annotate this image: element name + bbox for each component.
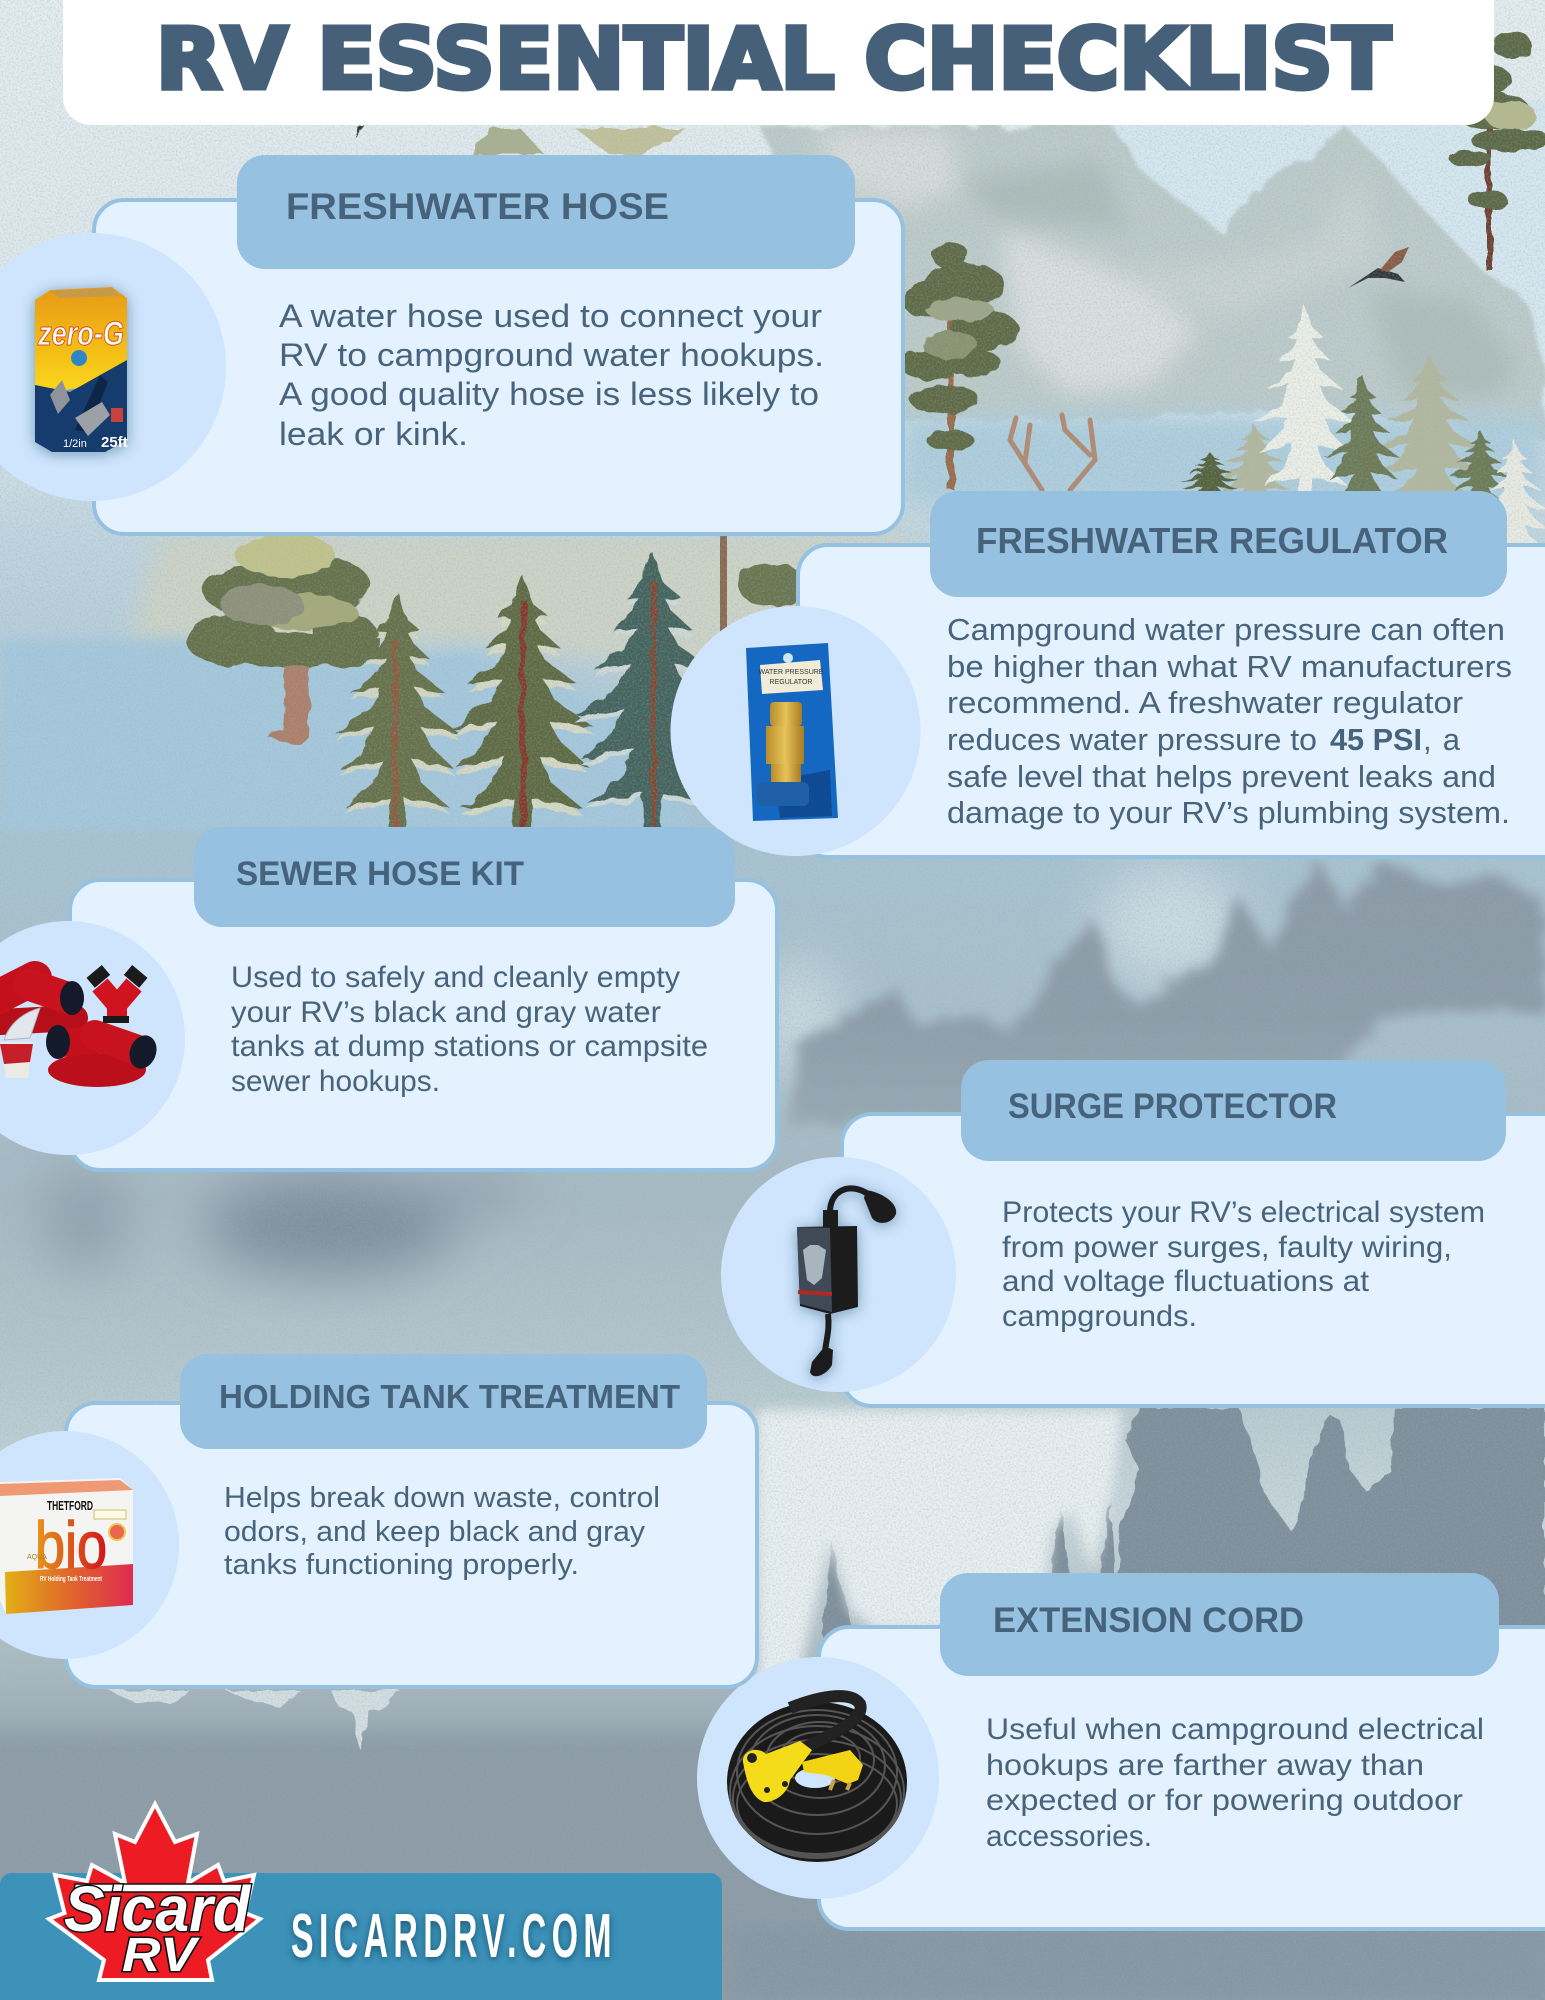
body text: Useful when campground electrical xyxy=(986,1713,1484,1746)
footer band xyxy=(0,1804,722,2000)
website: SICARDRV.COM xyxy=(291,1902,617,1971)
icon: surge protector xyxy=(797,1188,896,1376)
mid mist patch xyxy=(45,1165,530,1275)
icon: pressure regulator in package: WATER PRESSURE xyxy=(759,669,824,676)
lower snow streaks xyxy=(105,1690,400,1750)
heading: FRESHWATER REGULATOR xyxy=(976,520,1448,561)
icon: Thetford aqua-bio box: AQUA xyxy=(27,1554,47,1561)
logo: Sicard RV maple leaf xyxy=(49,1804,260,1982)
icon: Thetford aqua-bio box: RV Holding Tank Treatment xyxy=(40,1574,102,1583)
body text: A good quality hose is less likely to xyxy=(279,376,819,412)
body text: 45 PSI xyxy=(1330,722,1422,757)
body text: expected or for powering outdoor xyxy=(986,1784,1463,1817)
heading plate xyxy=(237,155,855,269)
image circle xyxy=(0,233,226,501)
body text: hookups are farther away than xyxy=(986,1749,1424,1782)
body text: tanks at dump stations or campsite xyxy=(231,1030,708,1063)
heading: SURGE PROTECTOR xyxy=(1008,1087,1337,1126)
icon: pressure regulator in package: REGULATOR xyxy=(770,679,812,686)
image circle xyxy=(721,1157,956,1392)
logo: Sicard RV maple leaf: Sicard xyxy=(64,1873,252,1945)
blue snowfield left xyxy=(0,640,700,830)
icon: Thetford aqua-bio box: THETFORD xyxy=(47,1498,93,1513)
icon: Zero-G hose box: zero-G xyxy=(37,315,124,353)
spruce: olive left xyxy=(335,592,460,838)
trunk: pale distant trunk xyxy=(720,534,727,634)
heading plate xyxy=(940,1573,1499,1676)
body text xyxy=(947,612,1512,830)
title band xyxy=(63,0,1494,125)
body text: damage to your RV’s plumbing system. xyxy=(947,795,1510,830)
small forest right xyxy=(1180,305,1545,560)
far mist forest xyxy=(790,860,1545,1125)
small top trees xyxy=(355,126,685,155)
body text: recommend. A freshwater regulator xyxy=(947,685,1463,720)
antlers xyxy=(1010,415,1095,490)
body text xyxy=(231,961,708,1098)
panel: freshwater hose xyxy=(0,155,903,534)
icon: extension cord coil xyxy=(727,1696,907,1862)
icon: red sewer hose kit xyxy=(0,965,161,1087)
body text: safe level that helps prevent leaks and xyxy=(947,759,1496,794)
heading: SEWER HOSE KIT xyxy=(236,855,524,893)
far mist gap xyxy=(760,865,1245,1080)
lower dark forest xyxy=(815,1408,1545,1740)
pine: right of first card xyxy=(900,241,1019,490)
body text: accessories. xyxy=(986,1820,1152,1853)
mountains xyxy=(760,125,1545,440)
logo: Sicard RV maple leaf: RV xyxy=(122,1929,200,1982)
body text xyxy=(986,1713,1484,1853)
body text: odors, and keep black and gray xyxy=(224,1516,646,1548)
lower right grey wash xyxy=(730,1925,1545,2000)
sky: pale blue upper right xyxy=(1050,100,1545,420)
spruce: dark teal right xyxy=(575,552,730,838)
panel: surge protector xyxy=(721,1060,1545,1406)
heading plate xyxy=(961,1060,1506,1161)
icon: Thetford aqua-bio box xyxy=(0,1478,133,1614)
blue wash below the mountains xyxy=(900,415,1545,505)
body text: Campground water pressure can often xyxy=(947,612,1505,647)
pine: behind first card xyxy=(186,533,379,745)
icon: pressure regulator in package xyxy=(746,643,838,821)
body text xyxy=(279,298,824,452)
panel: holding tank treatment xyxy=(0,1354,757,1687)
body text: RV to campground water hookups. xyxy=(279,337,824,373)
pine: far right top xyxy=(1448,31,1545,270)
body text: Used to safely and cleanly empty xyxy=(231,961,680,994)
mountain light and shadow washes xyxy=(820,130,1520,400)
body text: from power surges, faulty wiring, xyxy=(1002,1231,1452,1264)
panel: sewer hose kit xyxy=(0,827,777,1170)
bird xyxy=(1348,247,1409,288)
image circle xyxy=(0,921,185,1155)
heading plate xyxy=(930,491,1507,597)
pine branch near regulator xyxy=(738,563,806,607)
light snow between the trees xyxy=(757,1410,1122,1710)
body text xyxy=(1002,1196,1485,1333)
body text: and voltage fluctuations at xyxy=(1002,1265,1370,1298)
heading plate xyxy=(194,827,735,927)
body text: Helps break down waste, control xyxy=(224,1482,660,1514)
image circle xyxy=(670,606,920,856)
body text: sewer hookups. xyxy=(231,1065,440,1098)
body text: A water hose used to connect your xyxy=(279,298,822,334)
body text: be higher than what RV manufacturers xyxy=(947,649,1512,684)
image circle xyxy=(0,1431,179,1659)
body text xyxy=(224,1482,660,1581)
heading: EXTENSION CORD xyxy=(993,1601,1304,1640)
body text: your RV’s black and gray water xyxy=(231,996,661,1029)
panel: extension cord xyxy=(697,1573,1545,1929)
body text: reduces water pressure to xyxy=(947,722,1317,757)
icon: Thetford aqua-bio box: bio xyxy=(35,1508,107,1582)
icon: Zero-G hose box xyxy=(35,287,128,452)
title: RV ESSENTIAL CHECKLIST xyxy=(156,10,1391,108)
body text: campgrounds. xyxy=(1002,1300,1197,1333)
body text: tanks functioning properly. xyxy=(224,1549,579,1581)
spruce: olive center xyxy=(450,575,595,842)
heading: FRESHWATER HOSE xyxy=(286,186,669,227)
body text: , a xyxy=(1423,722,1461,757)
body text: Protects your RV’s electrical system xyxy=(1002,1196,1485,1229)
panel: freshwater regulator xyxy=(670,491,1545,857)
image circle xyxy=(697,1657,939,1899)
heading: HOLDING TANK TREATMENT xyxy=(219,1378,680,1415)
heading plate xyxy=(180,1354,707,1449)
ground: beige hill behind the forest xyxy=(130,534,910,740)
icon: Zero-G hose box: 1/2in xyxy=(63,438,87,450)
body text: leak or kink. xyxy=(279,416,468,452)
icon: Zero-G hose box: 25ft xyxy=(101,434,128,451)
bottom grey wash xyxy=(0,1730,1545,2000)
